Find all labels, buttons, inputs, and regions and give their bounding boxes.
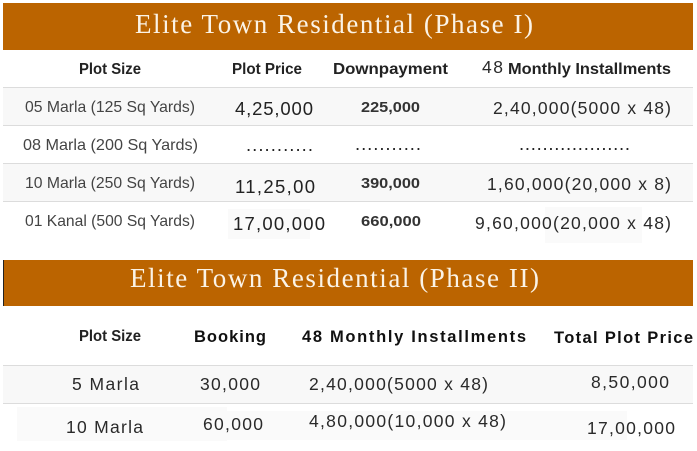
row: 10 Marla: 4,80,000(10,000 x 48) (309, 411, 506, 431)
row: 10 Marla (3, 164, 693, 201)
row: 01 Kanal: 9,60,000(20,000 x 48) (475, 213, 671, 233)
row: 05 Marla (3, 88, 693, 125)
row: 08 Marla: ................... (519, 133, 630, 154)
title banner: phase II: Elite Town Residential (Phase II) (130, 263, 539, 293)
row: 05 Marla: 4,25,000 (235, 98, 313, 119)
row: 10 Marla: 10 Marla (250 Sq Yards) (25, 175, 195, 192)
row: 01 Kanal (3, 202, 693, 243)
row: 10 Marla: 10 Marla (66, 417, 143, 437)
header row: phase I: Downpayment (333, 61, 448, 78)
header row: phase I: Plot Size (79, 61, 141, 78)
row: 10 Marla: 60,000 (203, 414, 263, 434)
panel: phase I table (3, 3, 693, 243)
row: 01 Kanal: 660,000 (361, 214, 421, 230)
row: 10 Marla: 11,25,00 (235, 176, 315, 197)
row: 05 Marla: 225,000 (361, 100, 420, 116)
header row: phase II (79, 328, 693, 347)
header row: phase II: Total Plot Price (554, 329, 693, 347)
header row: phase I (79, 57, 671, 78)
row: 10 Marla: 1,60,000(20,000 x 8) (487, 174, 671, 194)
row: 08 Marla: ........... (246, 134, 313, 155)
row: 08 Marla: ........... (355, 133, 421, 154)
row: 05 Marla: 05 Marla (125 Sq Yards) (25, 99, 195, 116)
row: 05 Marla: 2,40,000(5000 x 48) (493, 98, 671, 118)
title banner: phase I: Elite Town Residential (Phase I) (135, 9, 533, 39)
row: 08 Marla: 08 Marla (200 Sq Yards) (23, 137, 198, 154)
row: 08 Marla (3, 126, 693, 155)
row: 10 Marla: 390,000 (361, 176, 420, 192)
row: 5 Marla: 30,000 (200, 374, 260, 394)
header row: phase I: Monthly Installments (508, 61, 671, 78)
header row: phase II: Booking (194, 328, 266, 346)
panel: phase II table (3, 260, 693, 441)
title banner: phase I (3, 3, 693, 50)
header row: phase II: Plot Size (79, 328, 141, 345)
row: 5 Marla (3, 366, 693, 404)
row: 01 Kanal: 17,00,000 (233, 213, 325, 234)
header row: phase I: 48 (482, 57, 503, 77)
header row: phase I: Plot Price (232, 61, 302, 78)
row: 5 Marla: 8,50,000 (591, 372, 669, 392)
row: 10 Marla: 17,00,000 (587, 418, 675, 438)
header row: phase II: 48 Monthly Installments (302, 328, 526, 346)
row: 5 Marla: 5 Marla (72, 374, 139, 394)
row: 01 Kanal: 01 Kanal (500 Sq Yards) (25, 213, 195, 230)
title banner: phase II (3, 260, 693, 306)
row: 10 Marla (17, 407, 675, 441)
row: 5 Marla: 2,40,000(5000 x 48) (309, 374, 488, 394)
